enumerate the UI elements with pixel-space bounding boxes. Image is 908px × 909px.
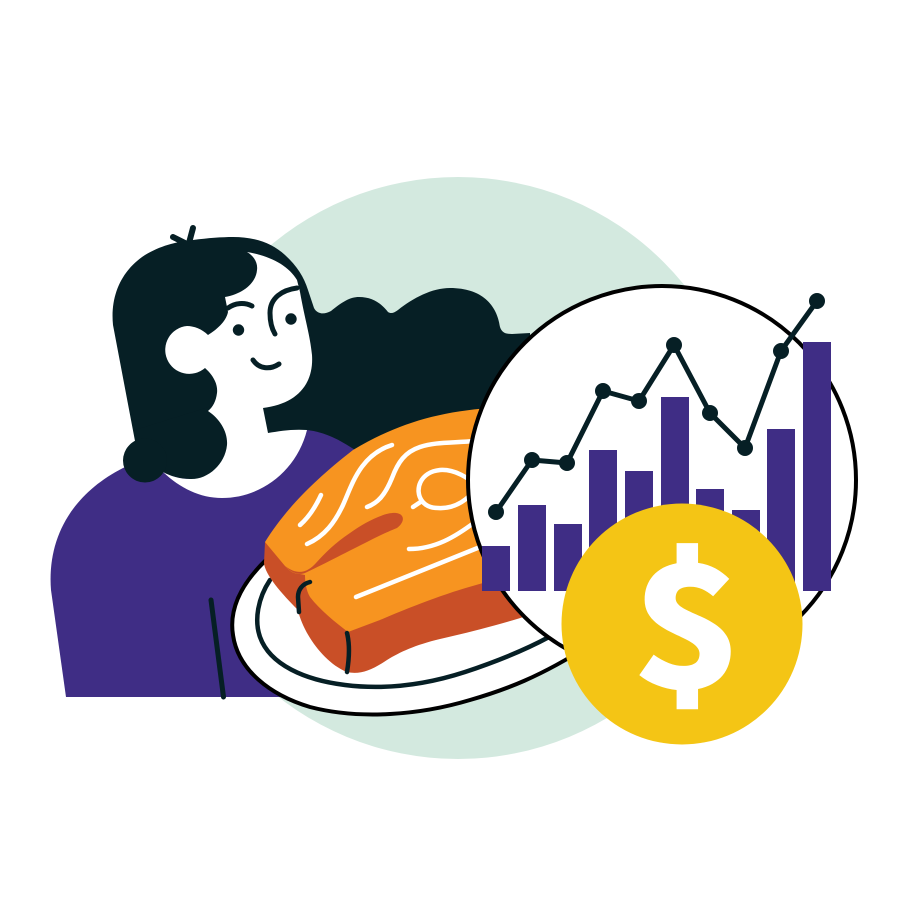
mint background circle: [167, 177, 749, 759]
smile: [253, 360, 279, 368]
chart circle: [468, 286, 856, 674]
woman figure: [51, 228, 530, 697]
plate: [232, 530, 590, 714]
line chart: [488, 293, 825, 520]
bar chart: [482, 342, 831, 591]
plate rim: [232, 530, 590, 714]
salmon steak: [264, 408, 560, 673]
dollar coin: [562, 491, 802, 744]
front hair lobe: [135, 405, 240, 485]
left eye: [233, 324, 244, 336]
face and neck: [163, 252, 312, 498]
right eye: [285, 313, 297, 325]
hair tuft: [173, 228, 193, 244]
salmon dark edge lines: [298, 582, 349, 672]
salmon flesh top: [265, 408, 560, 632]
back hair: [113, 237, 530, 482]
dollar sign: $: [632, 491, 743, 737]
plate inner line: [257, 580, 549, 687]
salmon skin side: [264, 542, 540, 673]
purple torso: [51, 430, 420, 697]
front hair and bun: [123, 405, 240, 485]
coin disc: [562, 504, 802, 744]
hair bun: [123, 438, 167, 482]
salmon white fat lines: [300, 441, 485, 597]
salmon shaded streak: [285, 513, 403, 574]
eyebrows and nose line: [228, 288, 297, 334]
arm line: [211, 600, 224, 697]
